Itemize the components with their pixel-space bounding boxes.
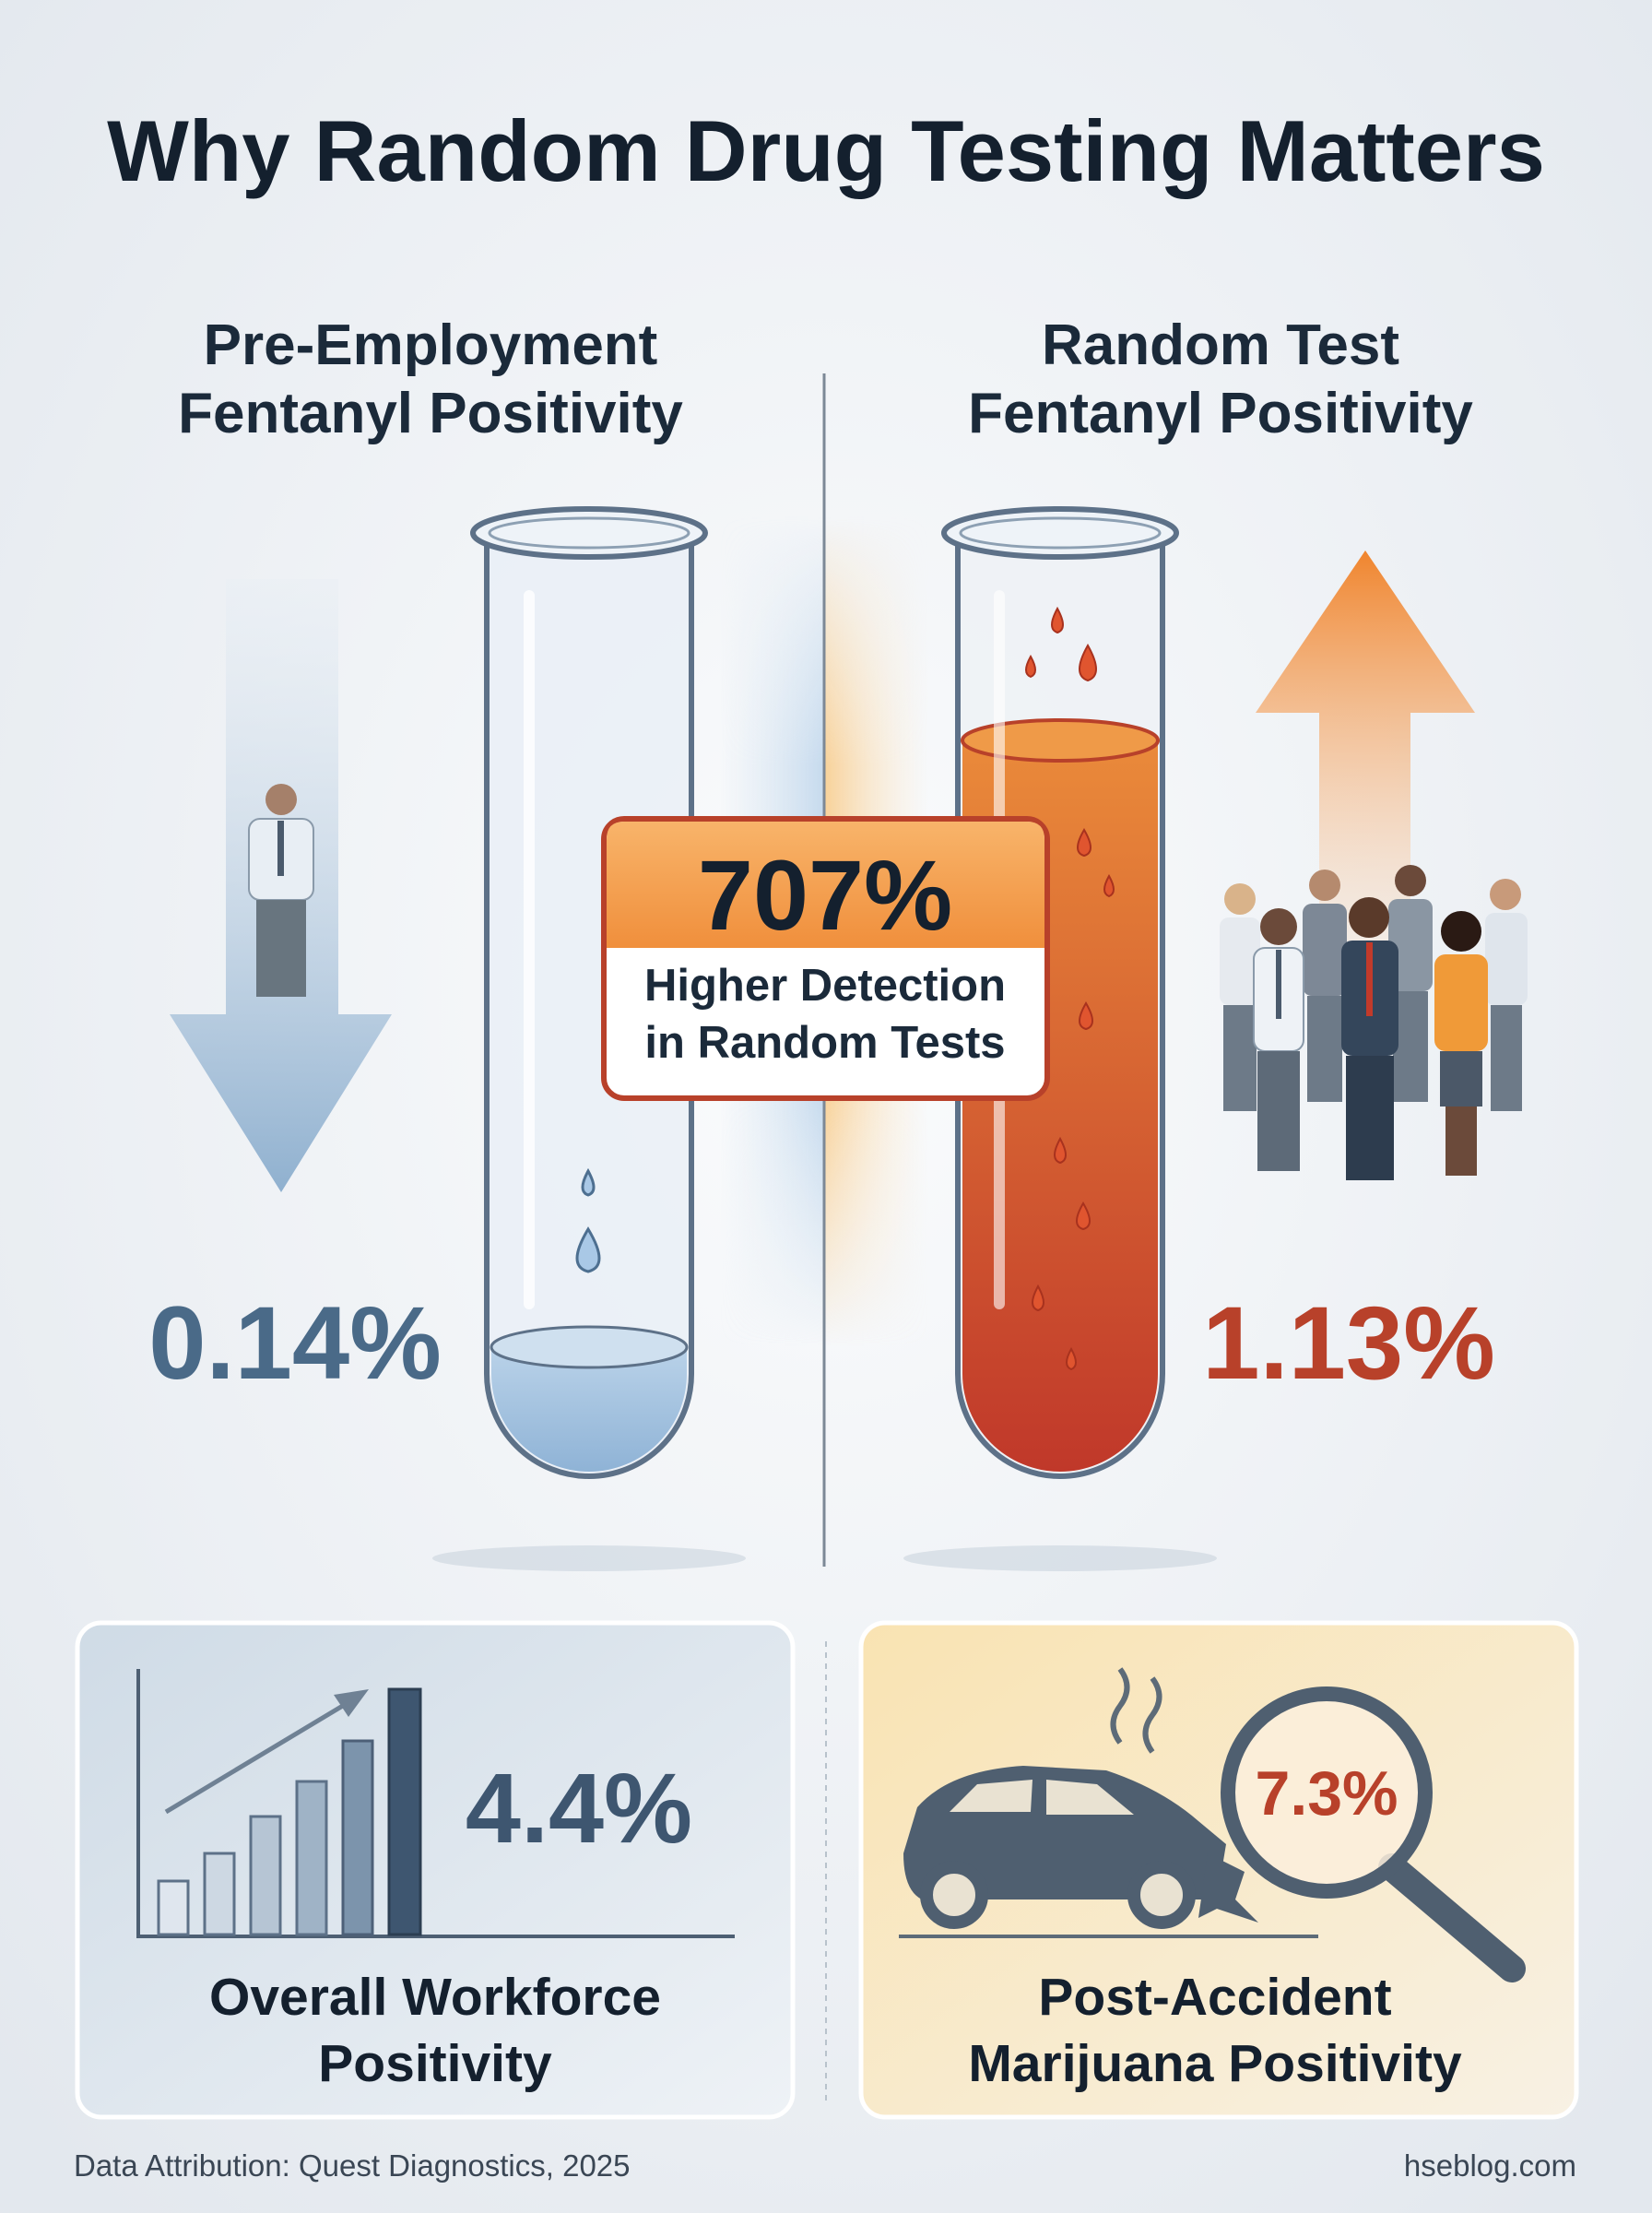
panel: overall workforce: Overall Workforce <box>209 1968 661 2027</box>
icon: magnifier <box>1228 1694 1512 1969</box>
icon: magnifier: 7.3% <box>1256 1758 1398 1828</box>
test tube: left <box>432 509 746 1571</box>
panel: post-accident <box>861 1623 1576 2117</box>
panel: overall workforce: 4.4% <box>466 1752 692 1864</box>
heading: pre-employment: Fentanyl Positivity <box>178 382 683 445</box>
icon: water drops <box>577 1171 599 1272</box>
heading: random test: Random Test <box>1042 314 1399 377</box>
icon: group of workers <box>1220 865 1528 1180</box>
icon: crashed car <box>899 1669 1318 1936</box>
test tube: right <box>903 509 1217 1571</box>
arrow: up <box>1256 550 1475 988</box>
stat: 1.13%: 1.13% <box>1202 1285 1495 1401</box>
panel: post-accident: Marijuana Positivity <box>968 2034 1462 2093</box>
callout: 707%: in Random Tests <box>644 1018 1006 1068</box>
callout: 707%: Higher Detection <box>644 961 1006 1011</box>
heading: random test: Fentanyl Positivity <box>968 382 1473 445</box>
bar chart <box>136 1669 735 1936</box>
callout: 707% <box>604 819 1047 1098</box>
panel: overall workforce: Positivity <box>318 2034 552 2093</box>
center glow <box>719 373 929 1567</box>
arrow: down <box>170 579 392 1192</box>
title: Why Random Drug Testing Matters <box>107 102 1545 199</box>
icon: person <box>249 784 313 997</box>
heading: pre-employment: Pre-Employment <box>204 314 657 377</box>
icon: red drops <box>1026 609 1114 1369</box>
callout: 707%: 707% <box>698 839 952 951</box>
footer: attribution: Data Attribution: Quest Diagnostics, 2025 <box>74 2148 631 2183</box>
panel: overall workforce <box>77 1623 793 2117</box>
stat: 0.14%: 0.14% <box>148 1285 442 1401</box>
footer: site: hseblog.com <box>1404 2148 1576 2183</box>
panel: post-accident: Post-Accident <box>1038 1968 1392 2027</box>
